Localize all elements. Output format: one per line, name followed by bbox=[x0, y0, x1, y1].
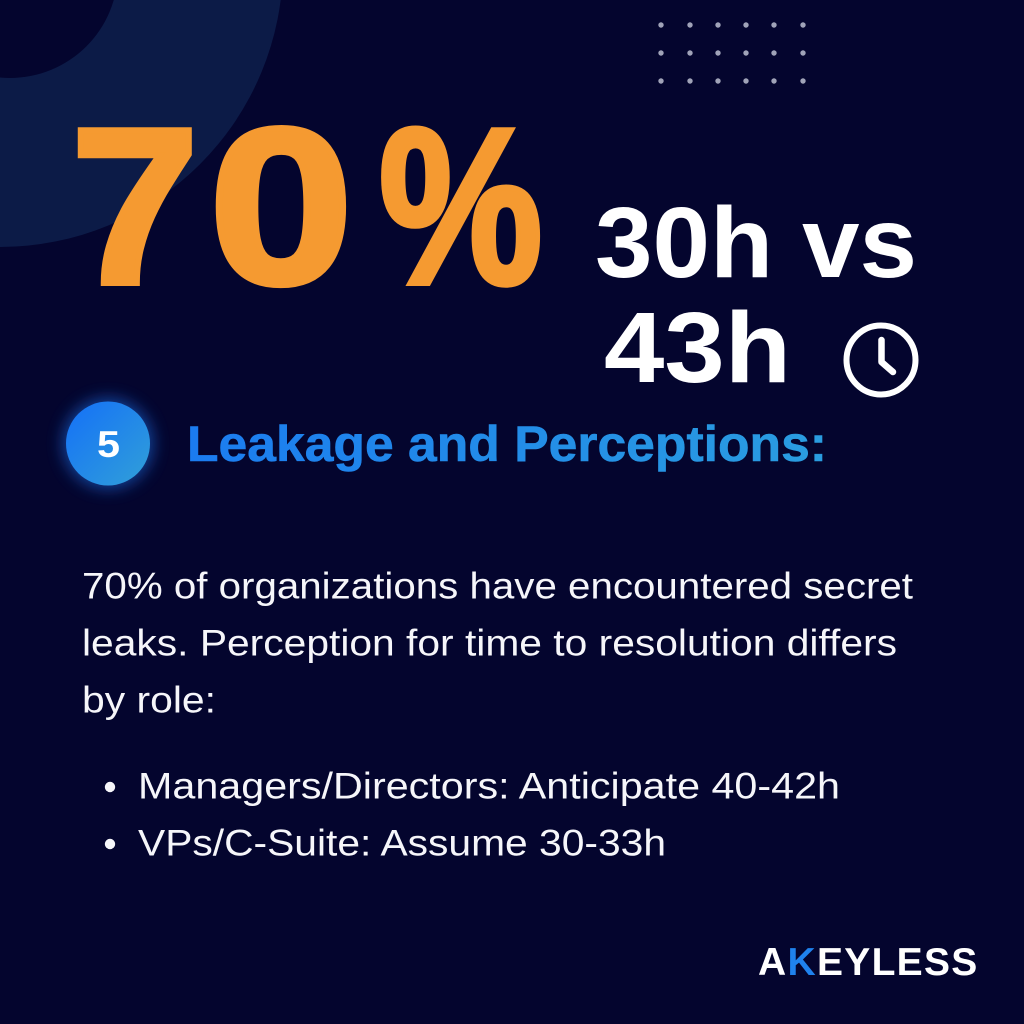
background decorative arc bbox=[0, 0, 283, 247]
number badge: 5 bbox=[97, 424, 120, 465]
bullet list: Managers/Directors: Anticipate 40-42h bbox=[138, 766, 840, 806]
logo: Akeyless: AKEYLESS bbox=[758, 941, 979, 984]
heading: Leakage and Perceptions: bbox=[187, 416, 827, 472]
dot grid bbox=[658, 22, 806, 84]
number badge bbox=[63, 398, 153, 488]
big stat: 70%: 0 bbox=[209, 83, 354, 331]
body paragraph: by role: bbox=[82, 680, 216, 720]
bullet list bbox=[105, 766, 840, 864]
stat: 30h vs 43h: 43h bbox=[604, 292, 791, 404]
big stat: 70%: % bbox=[379, 83, 543, 331]
body paragraph bbox=[82, 566, 914, 720]
stat: 30h vs 43h: 30h vs bbox=[595, 187, 917, 299]
body paragraph: 70% of organizations have encountered secret bbox=[82, 566, 914, 606]
body paragraph: leaks. Perception for time to resolution differs bbox=[82, 622, 897, 664]
big stat: 70% bbox=[71, 83, 543, 331]
stat: 30h vs 43h bbox=[595, 187, 917, 404]
big stat: 70%: 7 bbox=[71, 83, 199, 331]
icon: clock bbox=[846, 326, 916, 394]
bullet list: VPs/C-Suite: Assume 30-33h bbox=[138, 822, 666, 864]
